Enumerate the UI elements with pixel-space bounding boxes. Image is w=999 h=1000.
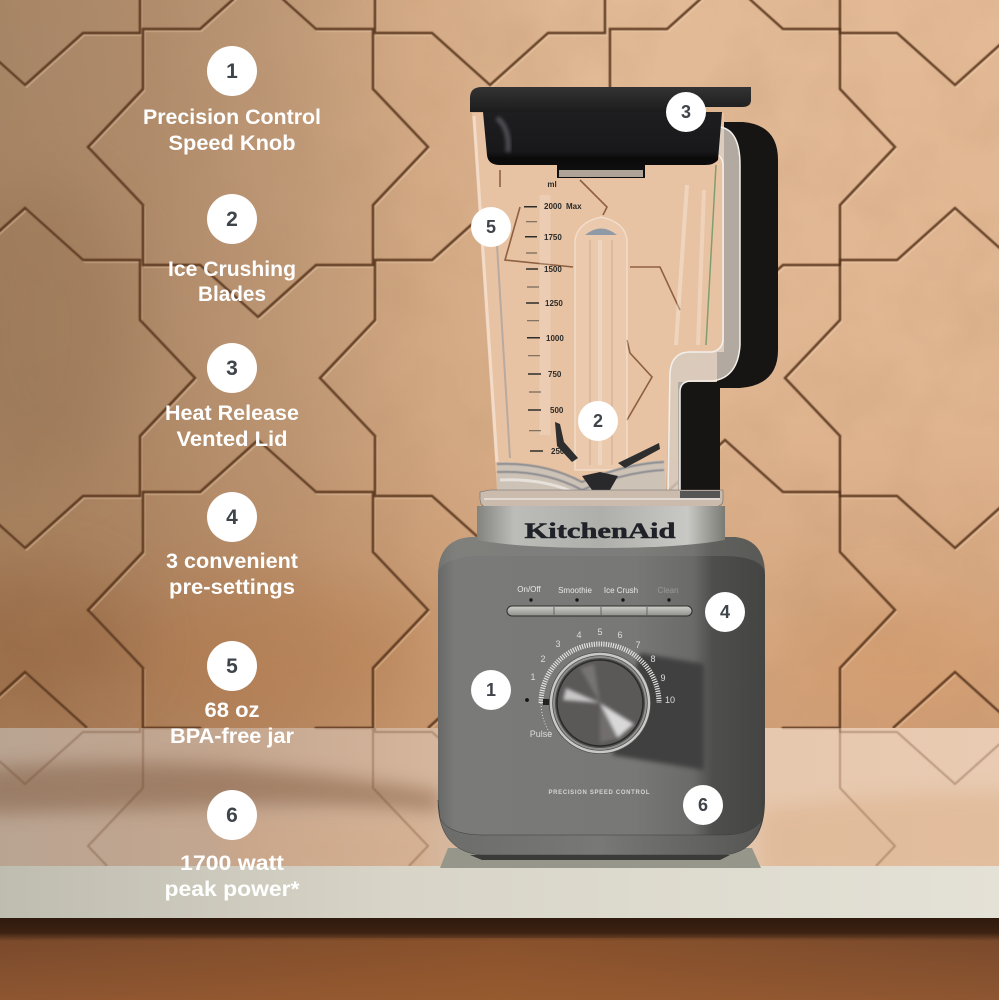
marker 6	[683, 785, 723, 825]
feature 2: 2	[226, 208, 238, 231]
marker 6: 6	[698, 795, 708, 815]
measurement scale: 750	[548, 370, 562, 379]
marble counter top	[0, 444, 999, 1000]
speed dial: 1	[530, 672, 536, 682]
refracted tile lines	[500, 170, 680, 420]
blender	[143, 46, 778, 901]
feature 1: Precision Control	[143, 106, 321, 129]
marker 3	[666, 92, 706, 132]
marker 5: 5	[486, 217, 496, 237]
feature 4: pre-settings	[169, 576, 295, 599]
jar edge highlights	[474, 116, 716, 462]
jar handle	[678, 122, 778, 492]
feature 1: Speed Knob	[168, 132, 296, 155]
feature 3	[165, 343, 299, 451]
feature 6	[164, 790, 300, 901]
measurement scale: 2000	[544, 202, 562, 211]
speed dial: 2	[540, 654, 546, 664]
knob shadow	[612, 653, 704, 770]
feature 4	[166, 492, 298, 599]
lid	[470, 87, 751, 112]
speed dial: 4	[576, 630, 582, 640]
measurement scale: 1000	[546, 334, 564, 343]
speed dial: 7	[635, 640, 641, 650]
speed dial: 3	[555, 639, 561, 649]
silver band	[477, 506, 725, 548]
speed dial: Pulse	[530, 729, 552, 739]
marker 2	[578, 401, 618, 441]
measurement scale: Max	[566, 202, 582, 211]
measurement scale: 1250	[545, 299, 563, 308]
glass jar	[438, 87, 765, 860]
speed dial: 10	[665, 695, 675, 705]
feature 3: Vented Lid	[176, 428, 288, 451]
handle translucent frame	[668, 127, 740, 492]
jar collar	[480, 490, 723, 507]
measurement scale: 500	[550, 406, 564, 415]
brand name: KitchenAid	[524, 518, 676, 543]
measurement scale: ml	[547, 180, 557, 189]
feature list	[143, 46, 321, 901]
feature 1	[143, 46, 321, 155]
feature 2	[168, 194, 296, 306]
measurement scale: 250	[551, 447, 565, 456]
center column	[575, 217, 627, 470]
preset buttons	[507, 585, 692, 616]
product markers	[471, 92, 745, 825]
feature 3: Heat Release	[165, 402, 299, 425]
marker 4	[705, 592, 745, 632]
marker 1: 1	[486, 680, 496, 700]
feature 6: 1700 watt	[180, 852, 284, 875]
feature 4: 4	[226, 506, 238, 529]
measurement scale: 1750	[544, 233, 562, 242]
measurement scale	[524, 180, 582, 456]
measurement scale: 1500	[544, 265, 562, 274]
preset buttons: Clean	[658, 586, 678, 595]
feature 1: 1	[226, 60, 238, 83]
blades	[555, 422, 660, 468]
jar bottom	[497, 460, 666, 495]
speed dial	[525, 627, 675, 754]
preset buttons: On/Off	[517, 585, 541, 594]
feature 2: Blades	[198, 283, 266, 306]
lid insert	[483, 112, 722, 178]
preset buttons: Smoothie	[558, 586, 592, 595]
speed dial: 6	[617, 630, 623, 640]
counter reflection under base	[440, 848, 761, 868]
feature 5	[170, 641, 294, 748]
feature 2: Ice Crushing	[168, 258, 296, 281]
feature 5: BPA-free jar	[170, 725, 294, 748]
marker 1	[471, 670, 511, 710]
feature 6: peak power*	[164, 878, 300, 901]
feature 6: 6	[226, 804, 238, 827]
feature 5: 68 oz	[204, 699, 260, 722]
marker 5	[471, 207, 511, 247]
speed dial: 8	[650, 654, 656, 664]
speed dial: 5	[597, 627, 603, 637]
model text: PRECISION SPEED CONTROL	[548, 790, 650, 796]
feature 3: 3	[226, 357, 238, 380]
marker 2: 2	[593, 411, 603, 431]
feature 4: 3 convenient	[166, 550, 298, 573]
marker 4: 4	[720, 602, 730, 622]
marker 3: 3	[681, 102, 691, 122]
feature 5: 5	[226, 655, 238, 678]
preset buttons: Ice Crush	[604, 586, 638, 595]
speed dial: 9	[660, 673, 666, 683]
tiled wall background	[0, 0, 999, 782]
motor base body	[438, 506, 765, 860]
